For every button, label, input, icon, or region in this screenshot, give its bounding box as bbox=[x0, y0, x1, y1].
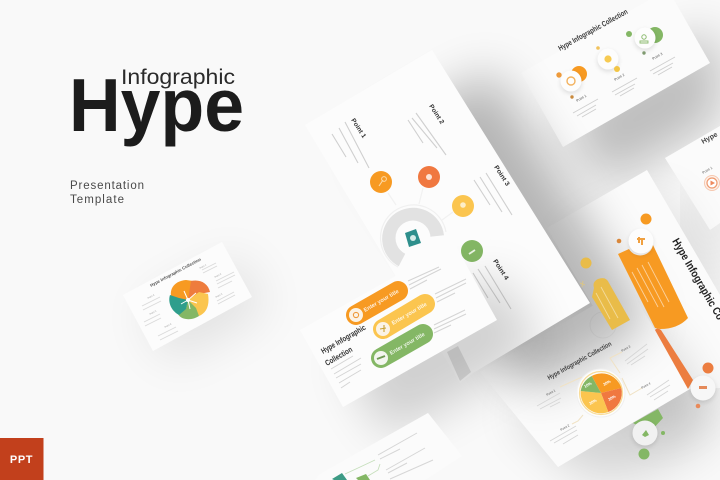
labels: Point 4 bbox=[147, 293, 156, 300]
pie chart: 10% bbox=[583, 380, 593, 389]
heading: Hype Infographic Collection bbox=[149, 257, 202, 288]
heading: Hype Infographic bbox=[320, 323, 368, 356]
main slide shadow bbox=[365, 70, 650, 393]
title: Hype: Hype bbox=[69, 63, 244, 147]
labels: Point 6 bbox=[164, 322, 173, 329]
labels bbox=[147, 263, 224, 329]
labels: Point 5 bbox=[149, 309, 158, 316]
panel: pill slide: Collection bbox=[324, 345, 354, 368]
pill 1: Enter your title bbox=[363, 289, 400, 314]
point 2: Point 2 bbox=[427, 103, 445, 126]
connector lines bbox=[388, 188, 453, 220]
pie chart bbox=[577, 369, 625, 417]
flow shapes bbox=[332, 473, 347, 480]
step 1 bbox=[556, 66, 598, 117]
badge: PPT: PPT bbox=[10, 454, 33, 466]
body text bbox=[331, 356, 361, 388]
point labels: Point 1 bbox=[546, 388, 556, 397]
flower chart bbox=[169, 280, 210, 319]
panel: pie slide background bbox=[480, 285, 720, 480]
shape: orange strip bbox=[655, 328, 693, 389]
panel: vertical slide content bbox=[580, 214, 720, 408]
panel: pie slide content bbox=[537, 341, 670, 444]
title block: Template bbox=[70, 194, 124, 206]
labels: Point 1 bbox=[199, 263, 208, 270]
step 2 bbox=[596, 46, 637, 96]
labels: Point 2 bbox=[214, 272, 223, 279]
heading: Hype Infographic Collection bbox=[547, 341, 613, 382]
panel: small right slide: Hype bbox=[701, 131, 719, 146]
pill 2: Enter your title bbox=[391, 302, 428, 327]
strip behind pill slide bbox=[447, 346, 471, 381]
shape: yellow tab bbox=[580, 258, 630, 338]
labels: Point 3 bbox=[215, 292, 224, 299]
text lines bbox=[378, 433, 433, 479]
panel: small right slide: Point 1 bbox=[702, 166, 713, 175]
panel: pill slide bbox=[300, 243, 542, 437]
icon: teal camera bbox=[405, 229, 421, 247]
panel: main slide bbox=[305, 50, 590, 383]
title: Infographic: Infographic bbox=[121, 66, 235, 89]
point 4: Point 4 bbox=[491, 258, 510, 282]
pie chart: 30% bbox=[588, 397, 598, 406]
step 2: Point 2 bbox=[614, 73, 625, 82]
panel: bottom slide bbox=[315, 413, 462, 480]
point 1: Point 1 bbox=[349, 117, 367, 140]
point 2 bbox=[408, 103, 446, 188]
point labels: Point 4 bbox=[641, 381, 651, 390]
point 3 bbox=[452, 164, 512, 217]
panel: vertical slide background bbox=[547, 170, 720, 440]
icon: top circle bbox=[617, 214, 654, 256]
icon: ring bbox=[704, 176, 720, 190]
icon: lower circle bbox=[690, 362, 716, 408]
step 3: Point 3 bbox=[652, 52, 663, 61]
point labels: Point 2 bbox=[560, 423, 570, 432]
panel: top right slide bbox=[521, 0, 720, 187]
pill 1 bbox=[349, 289, 400, 322]
badge: PPT bbox=[0, 438, 44, 480]
shape: orange card bbox=[618, 245, 688, 329]
semi donut bbox=[381, 205, 446, 267]
pie chart: 30% bbox=[602, 378, 612, 387]
pill 2 bbox=[376, 302, 428, 336]
point labels bbox=[546, 344, 651, 432]
step 3 bbox=[626, 27, 675, 75]
point 3: Point 3 bbox=[492, 164, 511, 188]
panel: flower slide bbox=[123, 242, 269, 364]
point labels: Point 3 bbox=[621, 344, 631, 353]
connector lines bbox=[345, 460, 380, 476]
subtitle: Presentation bbox=[70, 180, 144, 192]
panel: small right slide bbox=[665, 126, 720, 265]
step 1: Point 1 bbox=[576, 94, 587, 103]
pie chart: 30% bbox=[607, 393, 617, 402]
pill 3: Enter your title bbox=[389, 332, 426, 357]
point 1 bbox=[332, 117, 392, 193]
right text bbox=[408, 267, 466, 333]
connector lines bbox=[560, 352, 642, 424]
pill 3 bbox=[374, 332, 426, 365]
green lower shapes bbox=[632, 409, 665, 460]
point 4 bbox=[461, 240, 511, 309]
title block bbox=[69, 63, 244, 206]
